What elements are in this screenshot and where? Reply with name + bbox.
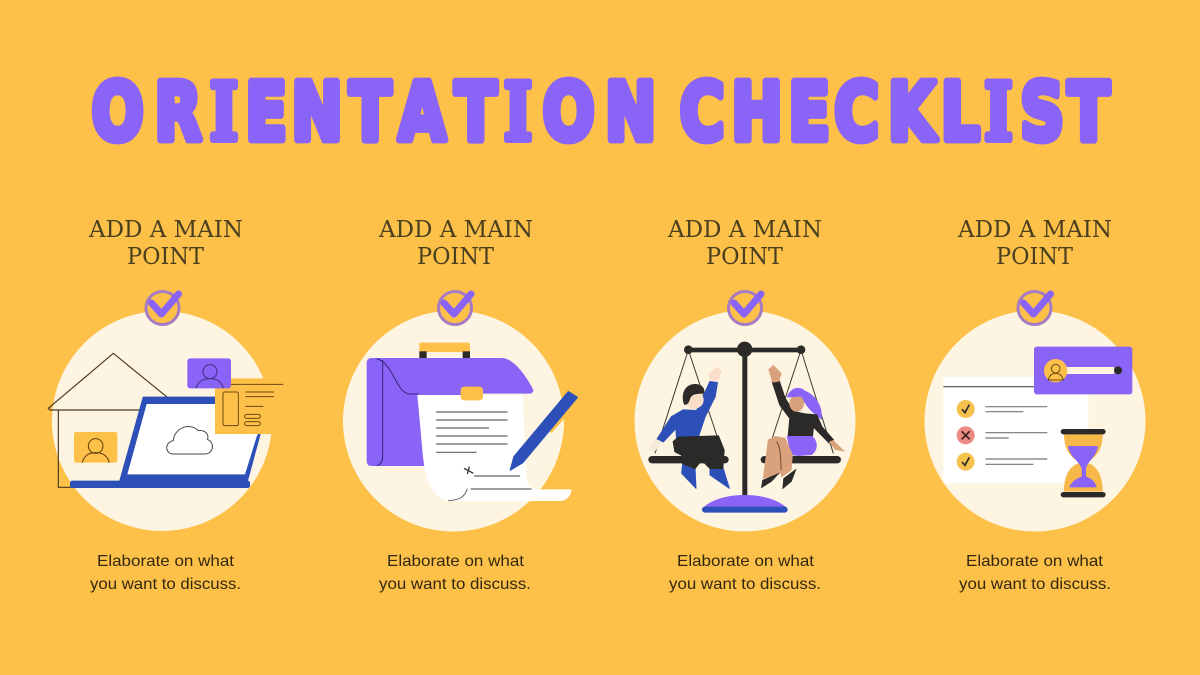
panel: column 3 [634,217,856,593]
description: you want to discuss. [669,576,821,593]
description: Elaborate on what [966,553,1104,570]
illustration: checklist and hourglass [943,347,1132,497]
description: Elaborate on what [97,553,235,570]
contract paper [417,395,572,501]
heading [378,217,533,270]
illustration: briefcase and contract [367,343,578,501]
panel: column 4 [924,217,1146,593]
profile progress card [1034,347,1132,394]
description [669,553,821,593]
background circle [52,311,272,531]
heading [667,217,822,270]
description: you want to discuss. [959,576,1111,593]
hourglass [1061,429,1106,497]
orange info card [215,378,283,434]
description: Elaborate on what [677,553,815,570]
description: you want to discuss. [90,576,241,593]
pen [510,392,578,470]
icon: check mark [728,292,762,324]
description [90,553,241,593]
background circle [634,310,856,532]
orange profile card [74,432,117,463]
scale [648,342,841,513]
heading: ADD A MAIN [957,217,1112,243]
description [379,553,531,593]
illustration: balance scale with two people [648,342,845,513]
icon: check mark [146,292,179,324]
heading: POINT [706,244,784,270]
man on swing [648,367,729,488]
background circle [924,310,1146,532]
heading: POINT [127,244,205,270]
briefcase handle [419,343,470,359]
icon: check mark [1018,292,1051,324]
heading [957,217,1112,270]
house outline [48,353,167,487]
description [959,553,1111,593]
heading: ADD A MAIN [378,217,533,243]
purple profile card [187,358,231,388]
heading [88,217,243,270]
illustration: house and laptop [48,353,283,488]
heading: POINT [996,244,1074,270]
woman on swing [761,365,845,489]
icon: check mark [438,292,472,324]
briefcase [367,358,533,466]
description: you want to discuss. [379,576,531,593]
panel: column 2 [343,217,578,593]
description: Elaborate on what [387,553,525,570]
laptop [70,397,275,488]
panel: column 1 [48,217,283,593]
background circle [343,310,564,532]
heading: POINT [417,244,495,270]
title: ORIENTATION CHECKLIST [92,66,1109,159]
briefcase clasp [461,387,483,400]
checklist sheet [943,377,1088,483]
heading: ADD A MAIN [667,217,822,243]
heading: ADD A MAIN [88,217,243,243]
